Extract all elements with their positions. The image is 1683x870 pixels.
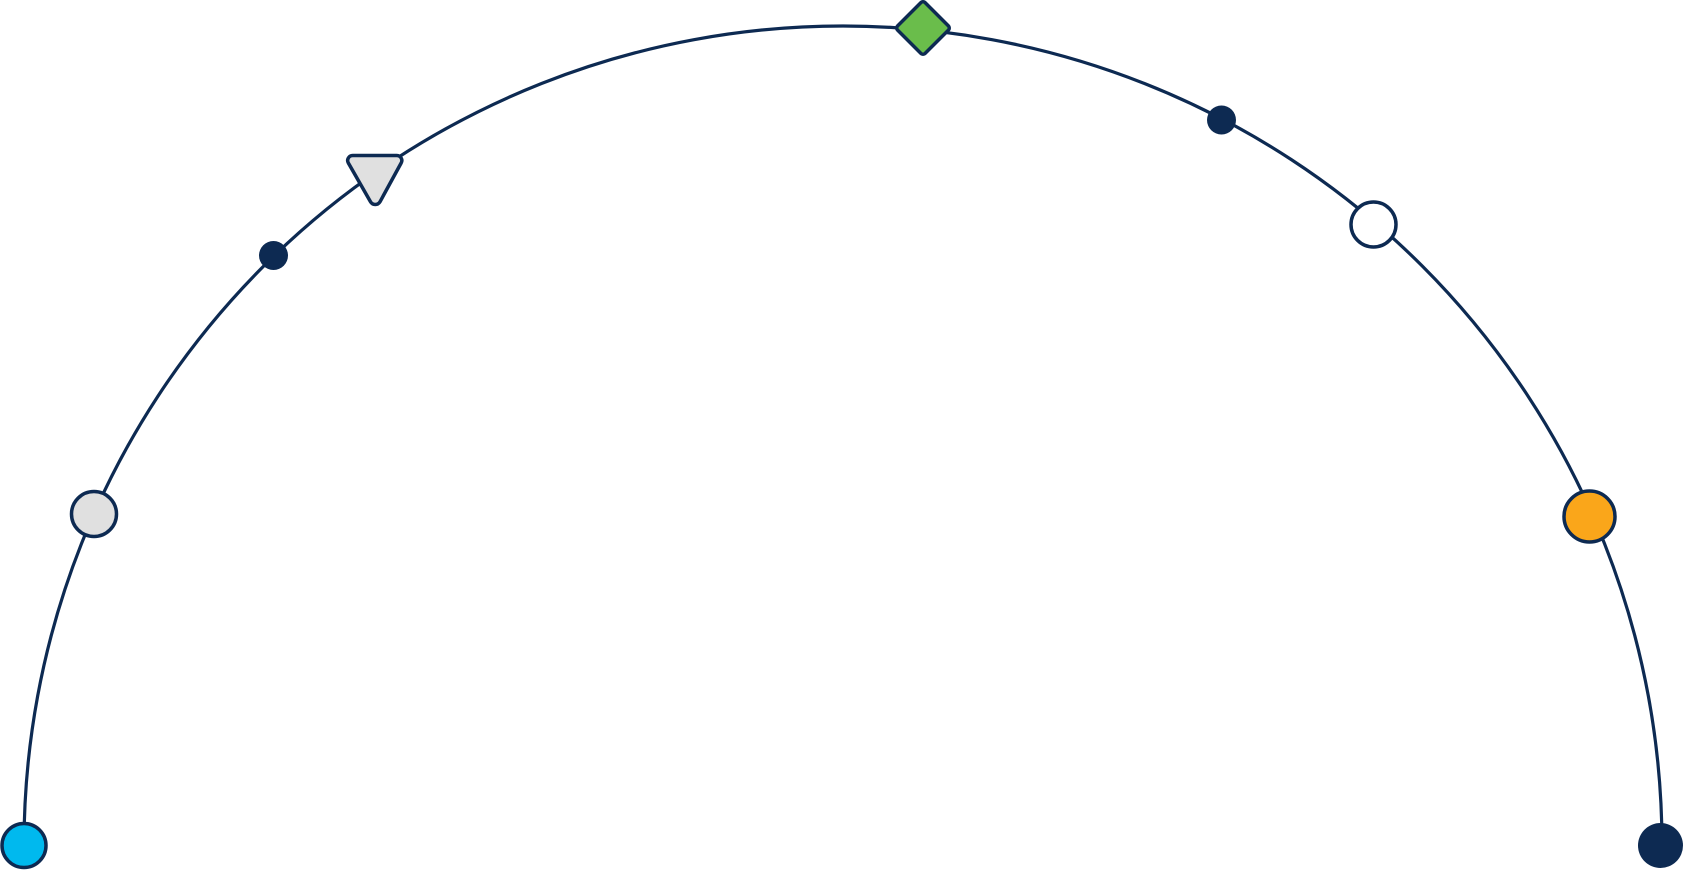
marker: white circle <box>1351 202 1396 247</box>
marker: grey inverted triangle <box>348 155 402 205</box>
marker: green diamond <box>895 0 951 56</box>
marker: orange circle <box>1564 491 1615 542</box>
marker: small navy dot right <box>1207 106 1236 134</box>
marker: grey circle <box>72 492 116 536</box>
marker: navy end circle <box>1638 823 1683 868</box>
marker: cyan start circle <box>2 824 46 868</box>
marker: small navy dot left <box>259 241 288 270</box>
